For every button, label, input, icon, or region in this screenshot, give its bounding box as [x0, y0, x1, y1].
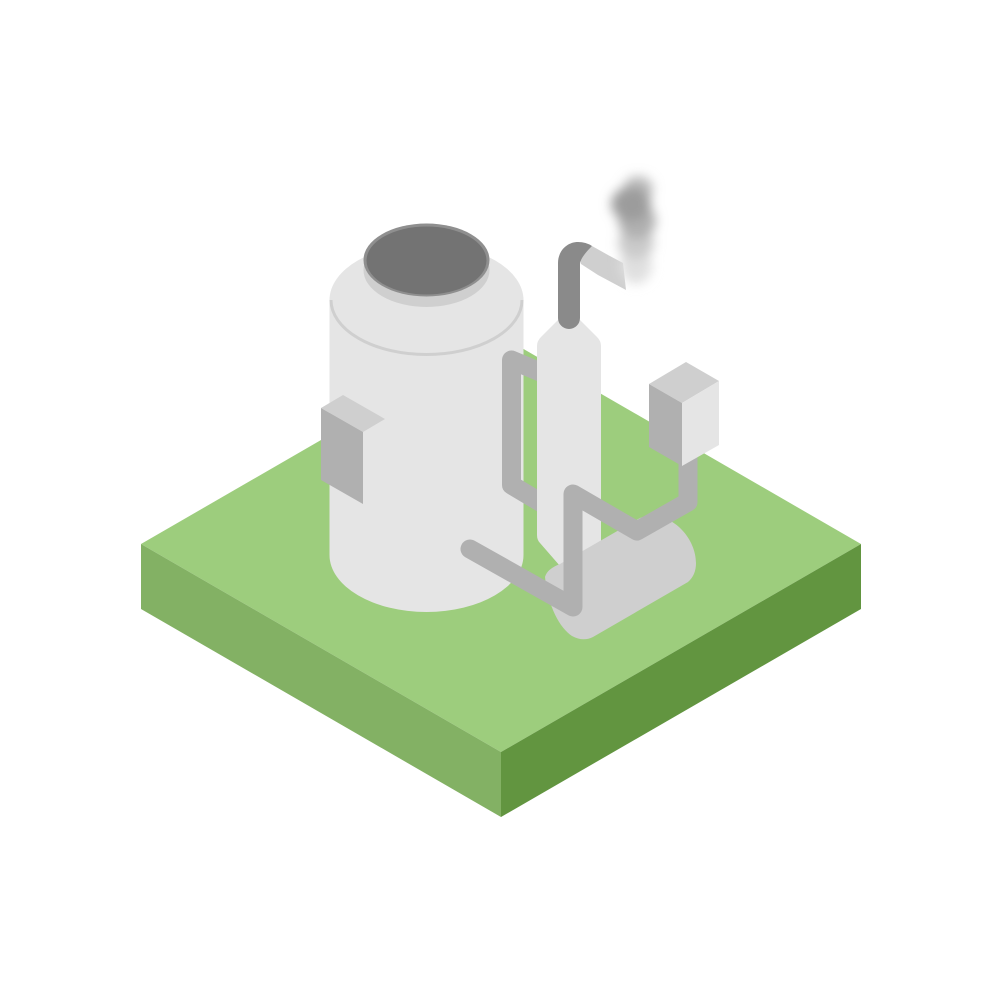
smoke top pale puff	[623, 176, 653, 202]
right box left face	[649, 384, 682, 466]
right box right face	[682, 381, 719, 466]
smoke light puff	[618, 227, 654, 259]
zigzag front pipe	[470, 450, 688, 607]
platform right face	[501, 544, 861, 817]
platform left face	[141, 544, 501, 817]
smoke dark puff	[611, 187, 651, 221]
tank cap base	[364, 233, 490, 307]
platform top face	[141, 336, 861, 752]
left box front face	[321, 408, 363, 504]
tank body	[330, 244, 524, 612]
narrow column vessel	[537, 320, 601, 570]
large storage tank	[330, 224, 524, 612]
left box top face	[321, 395, 385, 432]
platform: green isometric base	[141, 336, 861, 817]
tank cap top	[366, 226, 486, 294]
stack horizontal section	[580, 246, 626, 290]
left box on tank	[321, 395, 385, 504]
stack vertical section	[558, 242, 592, 329]
smoke mid puff	[618, 203, 656, 239]
smoke pale lower puff	[620, 246, 652, 284]
right box top face	[649, 362, 719, 403]
tank rim line	[331, 300, 522, 354]
tank cap rim	[364, 224, 490, 296]
right control box	[649, 362, 719, 466]
horizontal cylinder tank	[545, 516, 696, 639]
rear loop pipe	[512, 360, 545, 505]
exhaust stack pipe	[558, 242, 626, 329]
smoke plume	[611, 176, 656, 284]
